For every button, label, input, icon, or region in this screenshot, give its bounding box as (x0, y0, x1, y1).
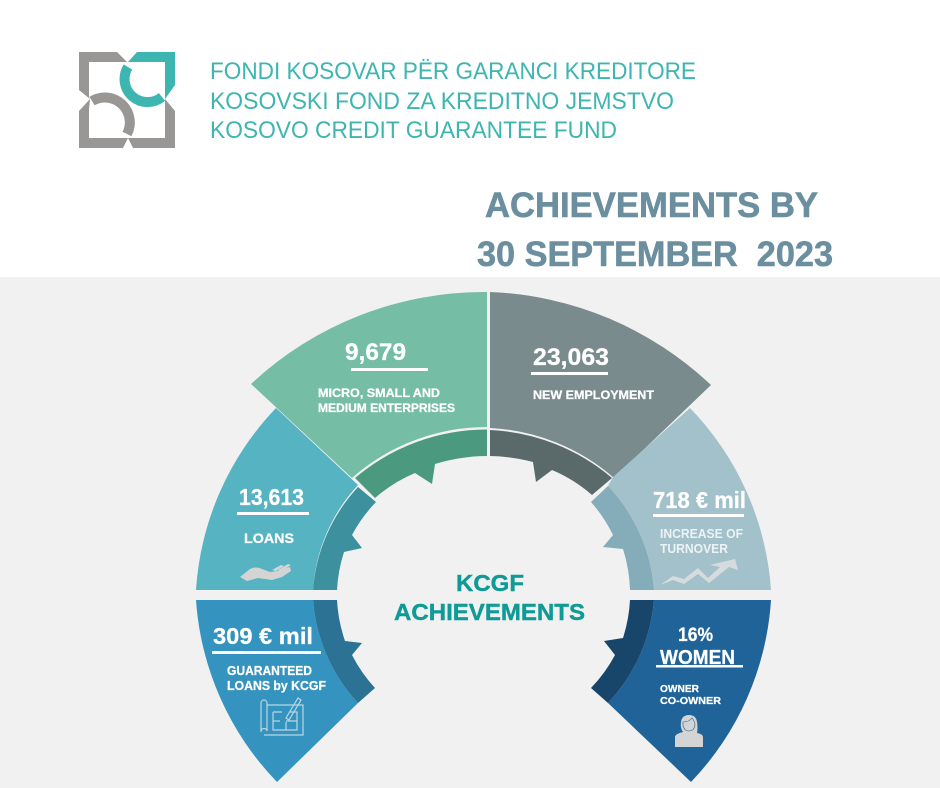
panel: enterprises (251, 292, 487, 498)
panel: enterprises: MEDIUM ENTERPRISES (318, 401, 455, 415)
panel: turnover: TURNOVER (660, 542, 728, 556)
centre label: ACHIEVEMENTS (394, 599, 585, 625)
panel: women: WOMEN (660, 647, 735, 669)
panel: new employment: NEW EMPLOYMENT (533, 388, 655, 402)
organisation name: KOSOVO CREDIT GUARANTEE FUND (210, 117, 617, 144)
icon: blueprint (261, 698, 303, 735)
panel: enterprises: MICRO, SMALL AND (318, 386, 440, 400)
panel: guaranteed loans (196, 600, 375, 782)
title: ACHIEVEMENTS BY (485, 186, 818, 225)
panel: turnover: 718 € mil (653, 487, 746, 513)
panel: guaranteed loans: 309 € mil (213, 623, 313, 649)
icon: rising arrow (660, 559, 738, 585)
organisation name (210, 58, 696, 144)
centre label (394, 570, 585, 625)
panel: women (591, 600, 771, 782)
panel: women: CO-OWNER (660, 695, 721, 707)
panel: women: 16% (678, 625, 713, 646)
icon: open hand (240, 564, 291, 581)
title: 30 SEPTEMBER 2023 (477, 235, 833, 274)
panel: turnover (591, 408, 771, 590)
panel: new employment (490, 292, 711, 495)
centre label: KCGF (456, 570, 524, 596)
panel: turnover: INCREASE OF (660, 527, 743, 541)
panel: loans: 13,613 (239, 484, 304, 510)
logo (79, 52, 175, 148)
panel: enterprises: 9,679 (345, 339, 406, 366)
panel: new employment: 23,063 (533, 344, 609, 371)
panel: women: OWNER (660, 683, 699, 695)
panel: guaranteed loans: GUARANTEED (227, 664, 312, 678)
title (477, 186, 833, 274)
organisation name: FONDI KOSOVAR PËR GARANCI KREDITORE (210, 58, 696, 85)
organisation name: KOSOVSKI FOND ZA KREDITNO JEMSTVO (210, 88, 674, 115)
panel: guaranteed loans: LOANS by KCGF (227, 679, 326, 693)
panel: loans (196, 408, 376, 590)
icon: woman (675, 715, 703, 747)
panel: loans: LOANS (244, 531, 294, 546)
